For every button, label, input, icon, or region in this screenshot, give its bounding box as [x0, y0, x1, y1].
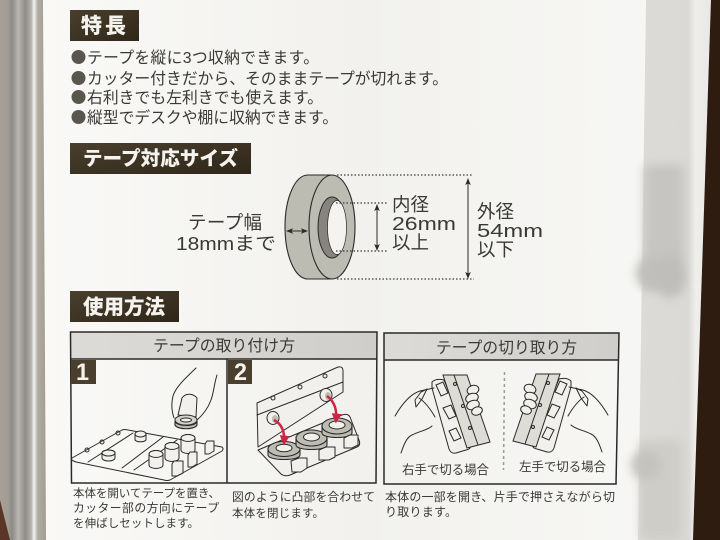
label: tape width: テープ幅	[188, 212, 262, 233]
caption: cutting: 本体の一部を開き、片手で押さえながら切	[385, 489, 615, 504]
label: inner diameter: 以上	[392, 232, 429, 253]
label: inner diameter: 26mm	[392, 214, 456, 234]
panel: attaching the tape	[70, 332, 377, 483]
panel title: テープの取り付け方	[153, 337, 295, 355]
label: outer diameter: 54mm	[477, 221, 543, 241]
label: inner diameter: 内径	[392, 194, 429, 215]
panel title: テープの切り取り方	[436, 339, 577, 357]
label: outer diameter: 外径	[477, 201, 514, 222]
illustration: step 1 opened case with hand	[72, 368, 223, 480]
icon: tape roll	[285, 175, 355, 279]
tape size diagram	[176, 175, 543, 279]
label: inner diameter	[392, 194, 456, 253]
illustration: left hand cutting	[513, 374, 608, 452]
background: silver plastic edge on the left	[0, 0, 46, 540]
label: left hand: 左手で切る場合	[519, 459, 606, 474]
caption: step 1: を伸ばしセットします。	[73, 517, 199, 530]
illustration: right hand cutting	[395, 375, 490, 453]
step number 1: 1	[76, 359, 89, 386]
caption: step 1: カッター部の方向にテープ	[73, 501, 219, 515]
background: dark table edge	[693, 0, 720, 540]
label: tape width	[176, 212, 276, 254]
caption: step 1: 本体を開いてテープを置き、	[73, 486, 220, 500]
label: outer diameter	[477, 201, 543, 260]
caption: cutting	[385, 489, 615, 519]
caption: step 2	[232, 490, 375, 520]
background: translucent plastic case on the right	[631, 0, 712, 540]
panel: cutting the tape	[384, 333, 619, 484]
divider between hand illustrations	[504, 372, 505, 470]
heading: how to use	[70, 291, 179, 322]
feature list	[72, 49, 448, 127]
feature list: カッター付きだから、そのままテープが切れます。	[87, 70, 448, 88]
heading: features	[70, 10, 139, 41]
illustration: step 2 closing the case with red arrows	[257, 367, 360, 476]
caption: step 2: 本体を閉じます。	[232, 506, 324, 520]
label: tape width: 18mmまで	[176, 233, 276, 254]
feature list: 縦型でデスクや棚に収納できます。	[87, 108, 338, 127]
dimension lines	[287, 175, 474, 279]
step number 2	[228, 359, 252, 386]
caption: step 1	[73, 486, 220, 530]
heading: supported tape size	[70, 143, 251, 174]
caption: step 2: 図のように凸部を合わせて	[232, 490, 375, 504]
feature list: 右利きでも左利きでも使えます。	[87, 89, 323, 107]
label: right hand: 右手で切る場合	[402, 462, 489, 477]
step number 1	[71, 359, 96, 386]
step number 2: 2	[234, 359, 247, 386]
heading: features: 特長	[81, 15, 126, 38]
label: outer diameter: 以下	[477, 239, 514, 260]
feature list: テープを縦に3つ収納できます。	[87, 49, 319, 67]
heading: how to use: 使用方法	[83, 295, 166, 319]
caption: cutting: り取ります。	[385, 505, 457, 519]
heading: supported tape size: テープ対応サイズ	[83, 147, 238, 170]
